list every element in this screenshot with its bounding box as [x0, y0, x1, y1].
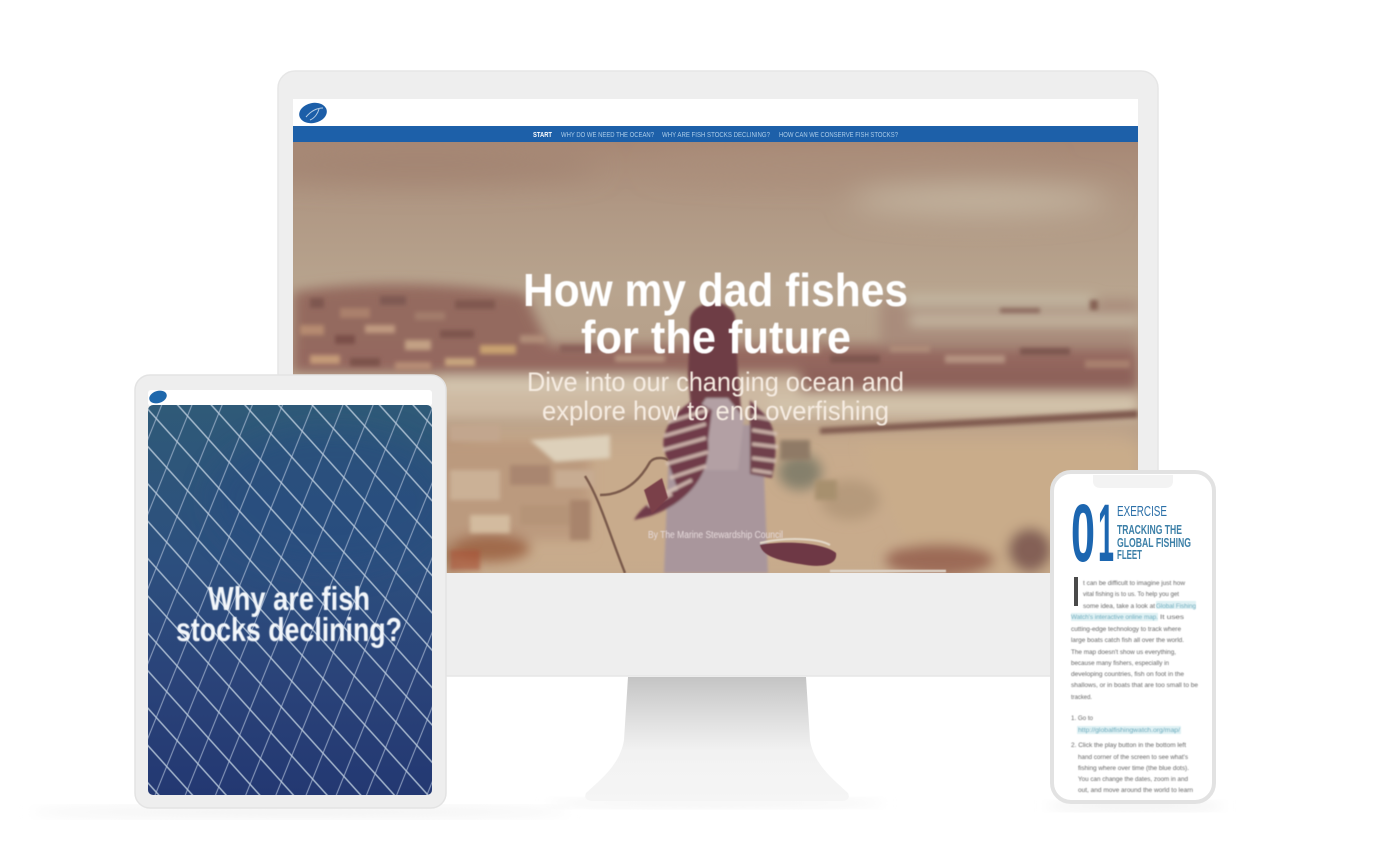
- monitor body: [278, 71, 1158, 676]
- exercise title: TRACKING THE: [1117, 522, 1182, 537]
- article paragraph: Global Fishing: [1156, 603, 1197, 610]
- instruction list: out, and move around the world to learn: [1078, 787, 1194, 794]
- tablet heading: stocks declining?: [176, 611, 402, 648]
- instruction list: [1071, 715, 1194, 794]
- device mockup scene: [134, 70, 1216, 815]
- hero subtitle: Dive into our changing ocean and: [527, 367, 904, 397]
- screen header bar: [293, 99, 1138, 127]
- floor shadows: [30, 799, 1225, 817]
- navigation bar: HOW CAN WE CONSERVE FISH STOCKS?: [779, 130, 898, 139]
- article paragraph: developing countries, fish on foot in the: [1071, 671, 1185, 678]
- desktop monitor: [240, 71, 1158, 801]
- harbour town mottling: [300, 296, 1138, 570]
- instruction list: http://globalfishingwatch.org/map/: [1078, 727, 1180, 734]
- tablet heading: Why are fish: [208, 580, 370, 617]
- tablet body: [135, 375, 446, 808]
- instruction list: 1. Go to: [1071, 715, 1094, 722]
- tablet logo: [148, 389, 168, 405]
- article paragraph: shallows, or in boats that are too small to be: [1071, 682, 1199, 689]
- exercise title: FLEET: [1117, 547, 1142, 562]
- article paragraph: some idea, take a look at: [1083, 603, 1155, 610]
- article paragraph: cutting-edge technology to track where: [1071, 626, 1182, 633]
- article paragraph: large boats catch fish all over the world.: [1071, 637, 1184, 644]
- drop cap: [1074, 577, 1078, 606]
- exercise label: EXERCISE: [1117, 503, 1167, 520]
- article paragraph: It uses: [1160, 614, 1184, 621]
- instruction list: 2. Click the play button in the bottom left: [1071, 742, 1186, 749]
- tablet heading: [176, 580, 402, 648]
- exercise title: GLOBAL FISHING: [1117, 535, 1191, 550]
- tablet net photo: [148, 405, 450, 795]
- hero subtitle: explore how to end overfishing: [542, 396, 889, 426]
- hero subtitle: [527, 367, 904, 426]
- navigation bar: WHY ARE FISH STOCKS DECLINING?: [662, 130, 770, 139]
- logo: fish badge: [297, 100, 329, 126]
- navigation bar: WHY DO WE NEED THE OCEAN?: [561, 130, 654, 139]
- article paragraph: The map doesn't show us everything,: [1071, 649, 1176, 656]
- tablet header bar: [148, 390, 432, 406]
- navigation bar: START: [533, 130, 552, 139]
- article paragraph: t can be difficult to imagine just how: [1083, 580, 1186, 587]
- navigation bar: [293, 126, 1138, 142]
- instruction list: hand corner of the screen to see what's: [1078, 754, 1188, 761]
- tablet: [135, 375, 450, 808]
- hero title: How my dad fishes: [523, 264, 908, 316]
- girl: [634, 303, 778, 573]
- byline: By The Marine Stewardship Council: [648, 530, 783, 541]
- article paragraph: Watch's interactive online map.: [1071, 614, 1158, 621]
- phone notch: [1093, 475, 1173, 488]
- phone: [1052, 472, 1214, 802]
- hero photo: girl with bicycle at harbour: [240, 142, 1138, 580]
- instruction list: fishing where over time (the blue dots).: [1078, 765, 1189, 772]
- article paragraph: [1071, 580, 1199, 701]
- hero title: for the future: [581, 311, 851, 363]
- exercise number: 0: [1071, 488, 1095, 579]
- bicycle: [585, 458, 946, 573]
- hero title: [523, 264, 908, 363]
- article paragraph: tracked.: [1071, 694, 1092, 701]
- phone body: [1052, 472, 1214, 802]
- article paragraph: vital fishing is to us. To help you get: [1083, 591, 1179, 598]
- monitor stand: [585, 677, 849, 801]
- instruction list: You can change the dates, zoom in and: [1078, 776, 1189, 783]
- phone: 1: [1098, 488, 1114, 579]
- exercise title: [1117, 522, 1191, 562]
- article paragraph: because many fishers, especially in: [1071, 660, 1170, 667]
